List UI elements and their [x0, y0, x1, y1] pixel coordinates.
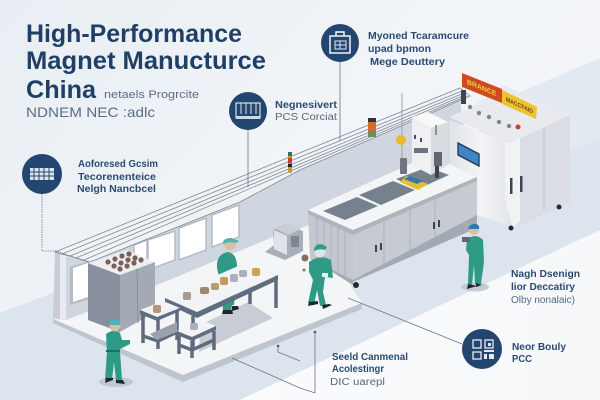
- white production floor: [53, 225, 362, 382]
- central dispenser column: [396, 93, 448, 190]
- central bench machine: [308, 155, 477, 288]
- label: high design: lior Deccatiry: [511, 282, 575, 293]
- label: temperature: Myoned Tcaramcure: [368, 31, 469, 42]
- label: sealed commercial: Seeld Canmenal: [332, 352, 408, 363]
- worker right: [461, 224, 489, 292]
- label: advanced design: Tecorenenteice: [78, 172, 156, 183]
- title: China: [26, 76, 97, 104]
- small work table: [140, 301, 180, 349]
- label: near body PCC: [512, 342, 566, 365]
- label: sealed commercial: Acolestingr: [332, 364, 384, 375]
- signage banners: [462, 73, 537, 119]
- title: Magnet Manucturce: [26, 47, 266, 75]
- label: advanced design: Aoforesed Gcsim: [78, 159, 158, 170]
- icon: sensor panel: [229, 92, 267, 130]
- label: magnetic PCS: Negnesivert: [275, 100, 338, 111]
- label: temperature: upad bpmon: [368, 44, 431, 55]
- worker at table: [217, 238, 239, 314]
- label: magnetic PCS: PCS Corciat: [275, 112, 337, 123]
- label: near body PCC: Neor Bouly: [512, 342, 566, 353]
- label: sealed commercial: [330, 352, 408, 388]
- low stool table: [177, 320, 216, 358]
- label: temperature: Mege Deuttery: [370, 57, 445, 68]
- subtitle: NDNEM NEC :adlc: [26, 104, 155, 120]
- air unit: [265, 223, 303, 260]
- label: advanced design: [77, 159, 158, 195]
- subtitle: [26, 89, 199, 120]
- ribbed roof beam: [55, 88, 470, 262]
- storage cabinet with parts: [88, 250, 155, 332]
- label: sealed commercial: DIC uarepl: [330, 377, 385, 388]
- rear processing machine: [449, 85, 570, 230]
- icon: grid panel: [22, 154, 62, 194]
- signal towers: [288, 90, 466, 173]
- icon: QR code: [462, 329, 502, 369]
- label: advanced design: Nelgh Nancbcel: [77, 184, 156, 195]
- label: temperature: [368, 31, 469, 68]
- label: near body PCC: PCC: [512, 354, 532, 365]
- signage banners: BRANCE: [467, 79, 497, 98]
- signage banners: MACCFAID: [506, 97, 534, 116]
- label: magnetic PCS: [275, 100, 338, 123]
- label: high design: Nagh Dsenign: [511, 269, 580, 280]
- title: [26, 20, 266, 104]
- label: high design: Olby nonalaic): [511, 295, 575, 306]
- subtitle: netaels Progrcite: [104, 89, 199, 101]
- worker centre: [302, 244, 333, 309]
- icon: case: [321, 24, 359, 62]
- title: High-Performance: [26, 20, 242, 48]
- label: high design: [511, 269, 580, 306]
- worker foreground left: [99, 319, 133, 387]
- connector lines: [42, 62, 462, 393]
- factory wall with windows: [53, 100, 470, 320]
- machine screen: [458, 143, 479, 166]
- long inspection table: [165, 238, 278, 350]
